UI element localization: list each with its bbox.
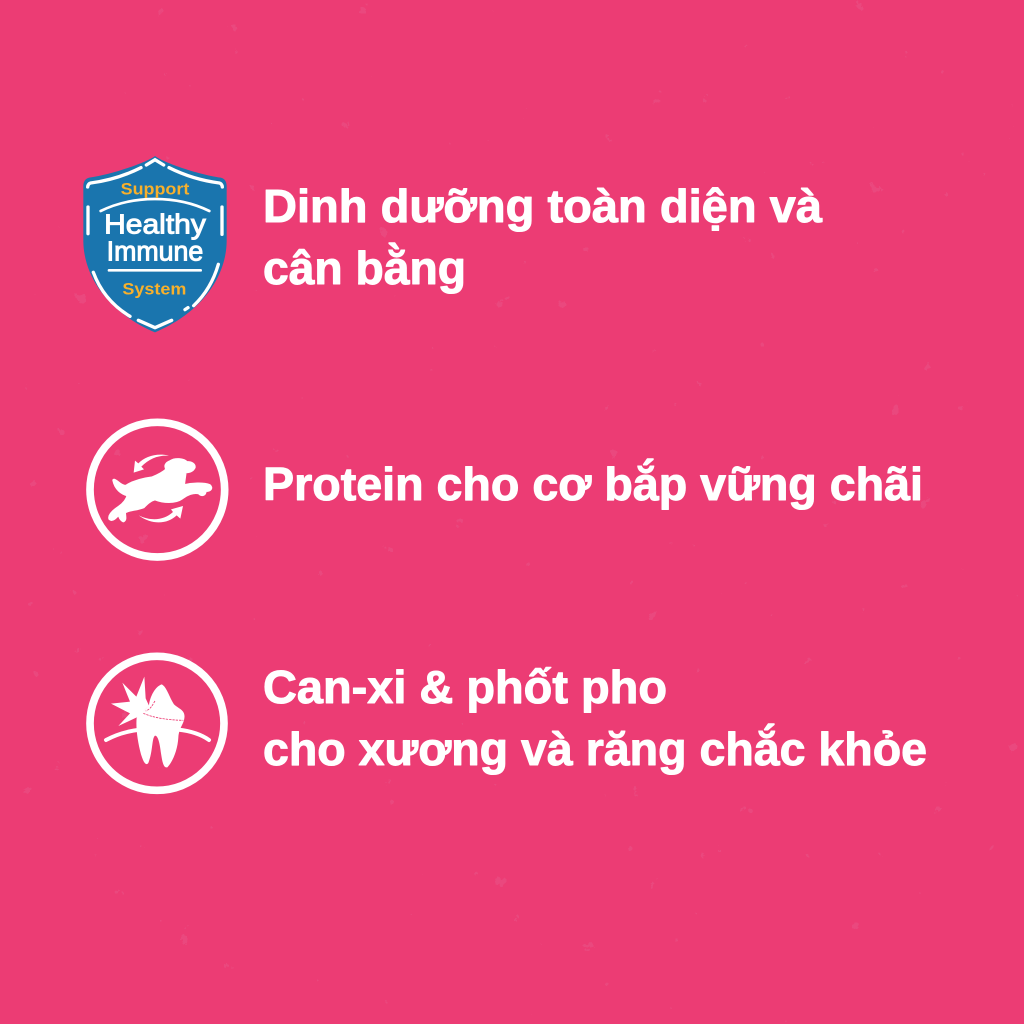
ring bbox=[90, 656, 224, 790]
heading: balanced nutrition: Dinh dưỡng toàn diện và bbox=[263, 180, 822, 232]
lower arrow bbox=[139, 506, 183, 522]
sparkle bbox=[111, 677, 149, 726]
tooth bbox=[136, 684, 185, 767]
shield dashed outline bbox=[88, 160, 222, 328]
heading: balanced nutrition bbox=[263, 180, 822, 294]
ring bbox=[90, 422, 225, 557]
heading: calcium and phosphorus: cho xương và răng chắc khỏe bbox=[263, 723, 927, 775]
tooth crack detail bbox=[143, 701, 183, 720]
heading: balanced nutrition: cân bằng bbox=[263, 242, 466, 294]
heading: protein: Protein cho cơ bắp vững chãi bbox=[263, 458, 923, 510]
icon: healthy immune system shield: Immune bbox=[107, 236, 203, 267]
heading: calcium and phosphorus bbox=[263, 661, 927, 775]
icon: healthy immune system shield bbox=[83, 156, 227, 332]
gum line bbox=[106, 730, 209, 740]
dog bbox=[110, 460, 211, 521]
icon: healthy immune system shield: System bbox=[122, 280, 186, 299]
icon: shining tooth in circle bbox=[90, 656, 224, 790]
shield text: Support bbox=[121, 179, 190, 198]
upper arrow bbox=[134, 455, 169, 473]
icon: running dog in circle bbox=[90, 422, 225, 557]
heading: calcium and phosphorus: Can-xi & phốt pho bbox=[263, 661, 667, 713]
icon: healthy immune system shield: Healthy bbox=[104, 208, 206, 239]
shield body bbox=[83, 156, 227, 332]
